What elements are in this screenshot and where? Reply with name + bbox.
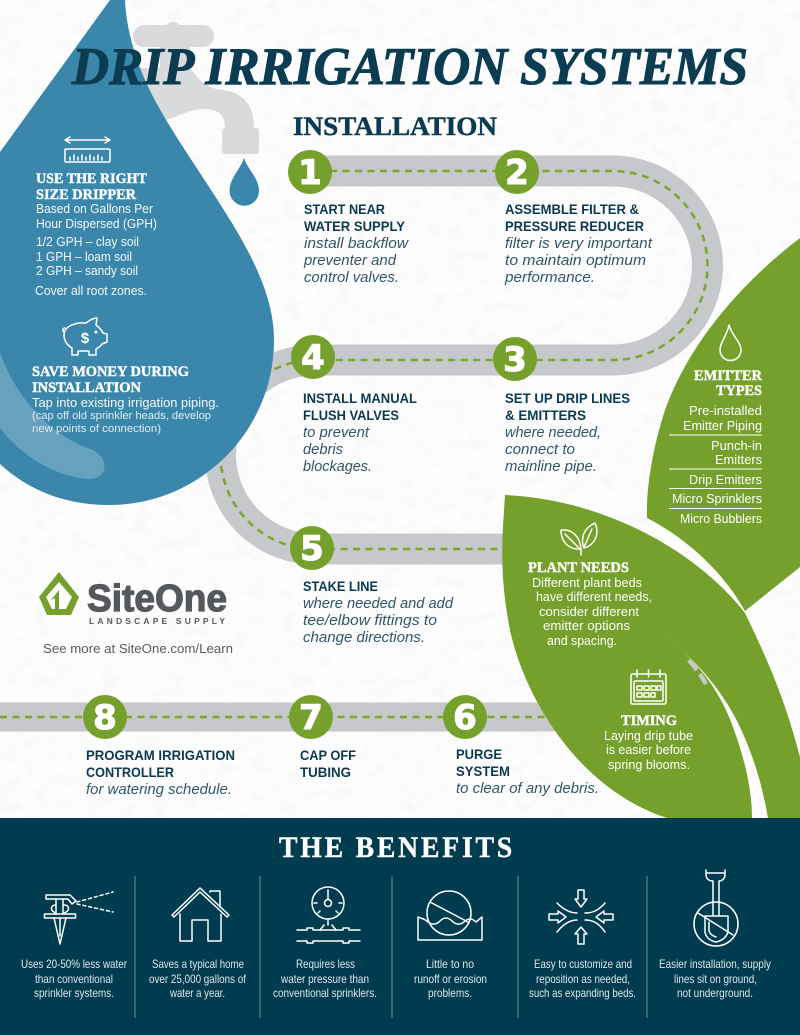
icon: ruler with width arrow [65,137,110,162]
text: plant needs: have different needs, [536,589,652,604]
heading: emitter types: TYPES [716,383,762,399]
step 3: SET UP DRIP LINES [505,390,630,406]
benefit: less pressure: water pressure than [280,972,369,986]
title: DRIP IRRIGATION SYSTEMS [71,38,748,96]
benefit: easier installation: not underground. [677,986,753,1000]
list: emitter types: Emitters [715,452,762,467]
panel: the benefits [0,818,800,1035]
icon: converging arrows [549,890,613,944]
step 4: debris [303,442,343,458]
step 4: to prevent [303,425,370,441]
icon: SiteOne pentagon mark [39,572,79,615]
benefit: easy to customize: Easy to customize and [534,957,632,971]
benefit: saves gallons: Saves a typical home [152,957,244,971]
icon: calendar [631,670,666,704]
step 8: for watering schedule. [86,782,232,798]
text: save money during installation: INSTALLATION [32,380,141,396]
benefit: saves gallons [149,888,247,1000]
text: plant needs: and spacing. [547,633,617,648]
benefit: no runoff: Little to no [426,957,474,971]
list: emitter types [669,403,762,526]
step 2 [495,150,653,286]
step 6: PURGE [456,746,502,762]
text: timing: TIMING [621,713,677,729]
link text: see more: See more at SiteOne.com/Learn [43,641,233,656]
icon: dollar sign: $ [81,330,90,347]
step 2: to maintain optimum [505,253,646,269]
step 1: WATER SUPPLY [304,218,406,234]
list: emitter types: Emitter Piping [683,418,762,433]
heading: emitter types [694,368,762,399]
text: use the right size dripper: 1 GPH – loam soil [36,250,132,264]
step 4: blockages. [303,459,372,475]
step 2: PRESSURE REDUCER [505,218,644,234]
panel: large water drop [0,0,274,505]
benefit: less pressure: Requires less [296,957,355,971]
leaf vein [657,633,768,818]
step 2: performance. [504,270,595,286]
text: plant needs [528,560,652,648]
icon: no shovel symbol [694,870,738,946]
step 4: 4 [301,338,325,378]
step 3: & EMITTERS [505,407,586,423]
panel: emitter types leaf [647,238,800,611]
step 3: where needed, [505,425,601,441]
text: timing [604,713,693,772]
benefit: less pressure [273,887,377,1000]
text: save money during installation [32,364,219,435]
step 6: 6 [453,698,477,738]
icon: sprinkler [44,892,113,944]
benefit: no runoff [414,891,487,1000]
benefit: less pressure: conventional sprinklers. [273,986,377,1000]
step 4 [291,335,417,475]
text: use the right size dripper: Hour Dispersed (GPH) [36,217,157,231]
text: use the right size dripper [35,171,157,298]
step 1: preventer and [303,253,397,269]
pipeline: lower straight pipe [0,702,570,732]
step 1: START NEAR [304,201,385,217]
icon: small water drop [230,158,259,206]
logo: SiteOne: SiteOne [87,578,227,620]
benefit: saves gallons: over 25,000 gallons of [149,972,247,986]
icon: two leaves [561,523,597,555]
benefit: easy to customize: such as expanding beds. [529,986,636,1000]
step 2: ASSEMBLE FILTER & [505,201,639,217]
step 1: install backflow [304,236,410,252]
text: use the right size dripper: SIZE DRIPPER [36,187,136,203]
text: timing: Laying drip tube [604,728,693,743]
benefit: less water: sprinkler systems. [34,986,114,1000]
step 6: SYSTEM [456,763,510,779]
text: timing: is easier before [606,742,691,757]
list: emitter types: Pre-installed [689,403,762,418]
text: save money during installation: (cap off old sprinkler heads, develop [32,410,211,422]
icon: house [172,888,229,941]
benefit: easy to customize: reposition as needed, [536,972,630,986]
icon: no runoff symbol [418,891,482,940]
step 4: INSTALL MANUAL [303,390,417,406]
list: emitter types: Micro Bubblers [680,511,762,526]
logo: SiteOne: LANDSCAPE SUPPLY [89,616,225,626]
benefit: easy to customize [529,890,636,1000]
step 2: filter is very important [505,236,653,252]
step 2: 2 [505,153,529,193]
list: emitter types: Micro Sprinklers [672,491,762,506]
text: use the right size dripper: USE THE RIGHT [36,171,147,187]
benefit: no runoff: runoff or erosion [414,972,487,986]
icon: outline water drop [720,325,741,360]
text: use the right size dripper: 2 GPH – sandy soil [36,264,138,278]
text: timing: spring blooms. [608,757,690,772]
text: plant needs: consider different [539,604,639,619]
step 5: where needed and add [303,596,454,612]
drop highlight [0,352,104,479]
benefit: less water: than conventional [35,972,113,986]
step 4: FLUSH VALVES [303,407,399,423]
logo: SiteOne [39,572,227,626]
icon: pressure gauge on pipe [297,887,360,943]
step 3: connect to [505,442,575,458]
text: use the right size dripper: Based on Gallons Per [36,202,153,216]
step 5: STAKE LINE [303,578,378,594]
step 7: TUBING [300,764,351,780]
list: emitter types: Punch-in [711,438,762,453]
benefit: saves gallons: water a year. [169,986,225,1000]
benefit: less water [21,892,127,1000]
heading: installation: INSTALLATION [293,112,497,141]
step 8: PROGRAM IRRIGATION [86,747,235,763]
step 5: tee/elbow fittings to [303,613,437,629]
step 3: mainline pipe. [505,459,597,475]
step 6: to clear of any debris. [456,781,599,797]
list: emitter types: Drip Emitters [689,472,762,487]
panel: plant needs and timing leaf [502,495,800,818]
step 1: control valves. [304,270,399,286]
text: use the right size dripper: Cover all root zones. [35,284,147,298]
text: save money during installation: SAVE MONEY DURING [32,364,189,380]
benefit: no runoff: problems. [428,986,472,1000]
step 8: 8 [93,698,117,738]
text: use the right size dripper: 1/2 GPH – clay soil [36,235,139,249]
heading: emitter types: EMITTER [694,368,762,384]
heading: the benefits: THE BENEFITS [279,831,515,864]
benefit: less water: Uses 20-50% less water [21,957,127,971]
step 1: 1 [298,153,322,193]
step 7: 7 [299,698,323,738]
step 6 [443,695,599,797]
benefit: easier installation [659,870,771,1000]
text: save money during installation: new points of connection) [32,423,161,435]
benefit: easier installation: Easier installation, supply [659,957,771,971]
step 8 [83,695,235,798]
icon: faucet [120,22,259,154]
text: plant needs: emitter options [543,618,631,633]
text: save money during installation: Tap into existing irrigation piping. [32,396,219,410]
step 7 [289,695,356,780]
step 7: CAP OFF [300,747,356,763]
text: plant needs: PLANT NEEDS [528,560,629,576]
step 1 [288,150,410,286]
step 5: 5 [300,529,324,569]
text: plant needs: Different plant beds [532,575,642,590]
step 5: change directions. [303,630,425,646]
step 3 [493,337,630,475]
step 5 [290,526,454,646]
step 8: CONTROLLER [86,764,174,780]
icon: piggy bank [63,318,107,355]
benefit: easier installation: lines sit on ground, [674,972,757,986]
pipeline: upper serpentine pipe [220,171,707,549]
step 3: 3 [503,340,527,380]
